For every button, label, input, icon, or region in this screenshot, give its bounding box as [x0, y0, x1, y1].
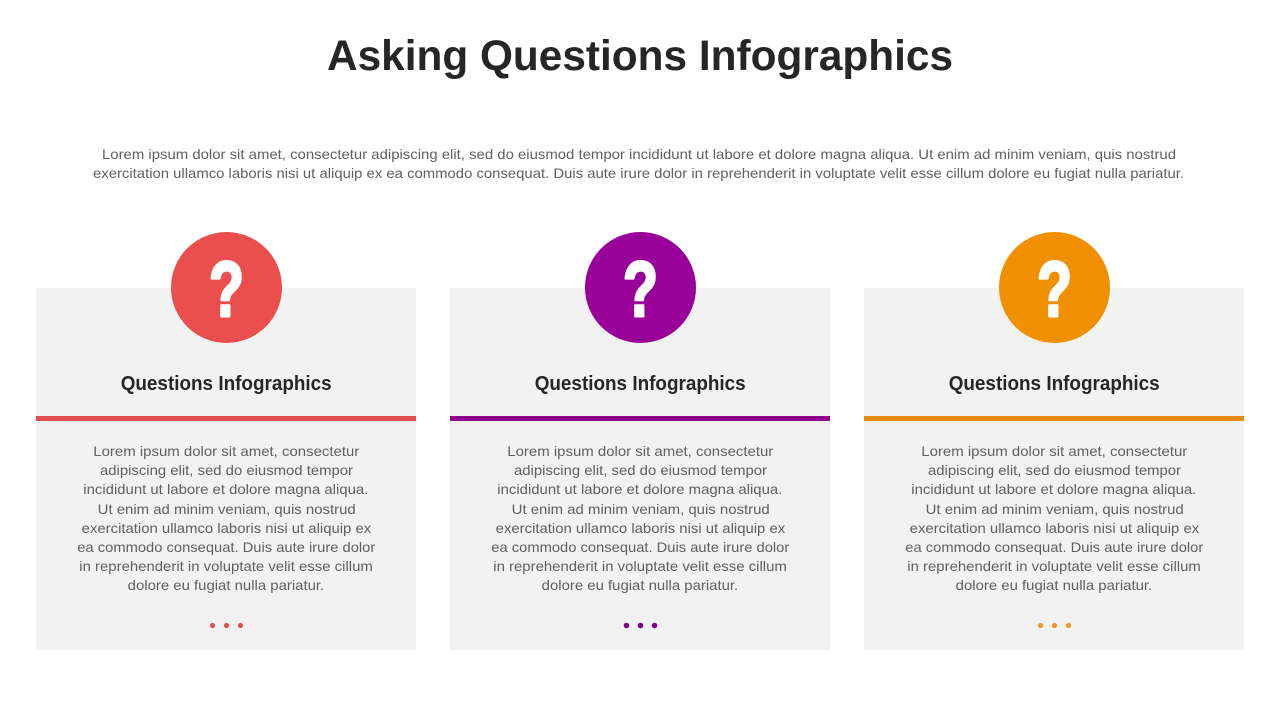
card 1 dots — [210, 623, 243, 628]
card 3 divider bar — [864, 416, 1244, 421]
icon: red question circle — [171, 232, 282, 343]
card 2 divider bar — [450, 416, 830, 421]
card 3 body text: adipiscing elit, sed do eiusmod tempor — [928, 462, 1181, 478]
icon: red question circle: ? — [209, 245, 244, 333]
card 2 body text: incididunt ut labore et dolore magna aliqua. — [497, 481, 782, 497]
card 1 body text: dolore eu fugiat nulla pariatur. — [128, 577, 324, 593]
intro text — [93, 146, 1184, 181]
card 3 body text: ea commodo consequat. Duis aute irure dolor — [905, 539, 1204, 555]
card 3 body text: incididunt ut labore et dolore magna aliqua. — [911, 481, 1196, 497]
card 3 body text: Ut enim ad minim veniam, quis nostrud — [926, 501, 1184, 517]
card 2 body text: Lorem ipsum dolor sit amet, consectetur — [507, 443, 774, 459]
icon: orange question circle: ? — [1037, 245, 1072, 333]
card 1 background — [36, 288, 416, 650]
intro text: Lorem ipsum dolor sit amet, consectetur adipiscing elit, sed do eiusmod tempor incididunt ut labore et dolore magna aliqua. Ut enim ad minim veniam, quis nostrud — [102, 146, 1176, 162]
card 1 body text: incididunt ut labore et dolore magna aliqua. — [83, 481, 368, 497]
card 1 divider bar — [36, 416, 416, 421]
icon: purple question circle: ? — [623, 245, 658, 333]
card 1 body text: adipiscing elit, sed do eiusmod tempor — [100, 462, 353, 478]
card 2 body text: exercitation ullamco laboris nisi ut aliquip ex — [496, 520, 785, 536]
card 1 body text — [77, 443, 376, 593]
card 1 body text: exercitation ullamco laboris nisi ut aliquip ex — [82, 520, 371, 536]
card 3 dots — [1038, 623, 1071, 628]
panel: card 2 purple — [450, 232, 830, 650]
card 1 body text: in reprehenderit in voluptate velit esse cillum — [79, 558, 373, 574]
card 2 body text: Ut enim ad minim veniam, quis nostrud — [512, 501, 770, 517]
card 2 body text — [491, 443, 790, 593]
card 3 background — [864, 288, 1244, 650]
card 1 body text: Lorem ipsum dolor sit amet, consectetur — [93, 443, 360, 459]
card 2 heading: Questions Infographics — [535, 373, 746, 395]
icon: orange question circle — [999, 232, 1110, 343]
card 3 body text: in reprehenderit in voluptate velit esse cillum — [907, 558, 1201, 574]
title: Asking Questions Infographics — [327, 32, 953, 80]
card 3 heading: Questions Infographics — [949, 373, 1160, 395]
intro text: exercitation ullamco laboris nisi ut aliquip ex ea commodo consequat. Duis aute irure dolor in reprehenderit in voluptate velit esse cillum dolore eu fugiat nulla pariatur. — [93, 165, 1184, 181]
card 2 body text: ea commodo consequat. Duis aute irure dolor — [491, 539, 790, 555]
icon: purple question circle — [585, 232, 696, 343]
card 2 background — [450, 288, 830, 650]
panel: card 1 red — [36, 232, 416, 650]
card 2 dots — [624, 623, 657, 628]
card 2 body text: adipiscing elit, sed do eiusmod tempor — [514, 462, 767, 478]
card 3 body text — [905, 443, 1204, 593]
card 1 body text: Ut enim ad minim veniam, quis nostrud — [98, 501, 356, 517]
panel: card 3 orange — [864, 232, 1244, 650]
card 2 body text: in reprehenderit in voluptate velit esse cillum — [493, 558, 787, 574]
card 3 body text: exercitation ullamco laboris nisi ut aliquip ex — [910, 520, 1199, 536]
card 3 body text: dolore eu fugiat nulla pariatur. — [956, 577, 1152, 593]
card 3 body text: Lorem ipsum dolor sit amet, consectetur — [921, 443, 1188, 459]
card 2 body text: dolore eu fugiat nulla pariatur. — [542, 577, 738, 593]
card 1 body text: ea commodo consequat. Duis aute irure dolor — [77, 539, 376, 555]
card 1 heading: Questions Infographics — [121, 373, 332, 395]
